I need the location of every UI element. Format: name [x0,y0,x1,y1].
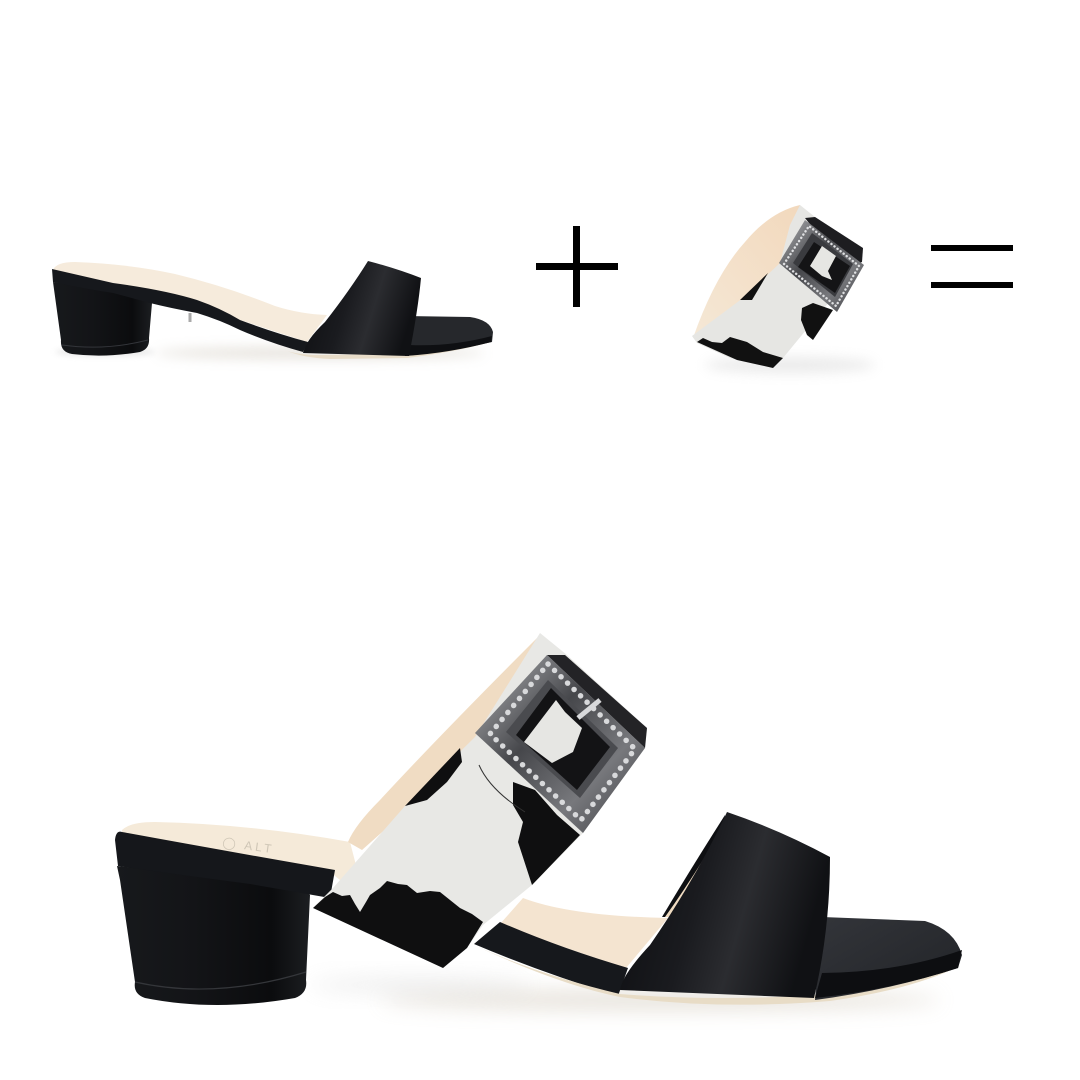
brand on insole: ◯ ALT [222,835,275,856]
cowhide patch top [547,655,647,748]
toe bed [405,316,493,356]
cowhide patch upper [405,748,462,806]
toe bed [815,917,962,1000]
insole [53,262,327,342]
strap lining [693,205,805,338]
visible fur through buckle [524,700,582,763]
rhinestones [784,226,859,306]
inner frame [506,680,618,798]
strap lining behind buckle [348,635,548,850]
small cowhide buckle strap [692,205,875,373]
front strap lining [662,815,725,917]
sole rim [115,832,335,898]
heel insole [122,822,365,900]
sole edge [287,342,491,359]
seam line [479,765,525,812]
midfoot rim [474,922,628,996]
cowhide patch bottom [313,881,483,968]
midfoot insole [500,898,668,968]
prong [578,700,600,718]
cowhide strap [313,633,647,968]
icon: equals sign [931,245,1013,288]
small black mule sandal [52,261,493,359]
rhinestone band [490,664,635,820]
icon: plus sign [536,226,618,307]
large styled sandal with cowhide strap [115,633,962,1010]
block heel [117,866,310,1005]
sole rim [52,269,308,352]
heel pull [188,313,192,322]
heel [53,282,152,356]
buckle opening [516,688,610,790]
sole edge [476,946,960,1005]
front strap [620,812,830,998]
buckle [779,220,864,312]
cowhide patch right [513,782,580,885]
strap cowhide [692,205,863,368]
cowhide patches [697,337,783,368]
large buckle [475,655,645,833]
ground shadow [380,990,940,1010]
vamp strap [303,261,421,356]
